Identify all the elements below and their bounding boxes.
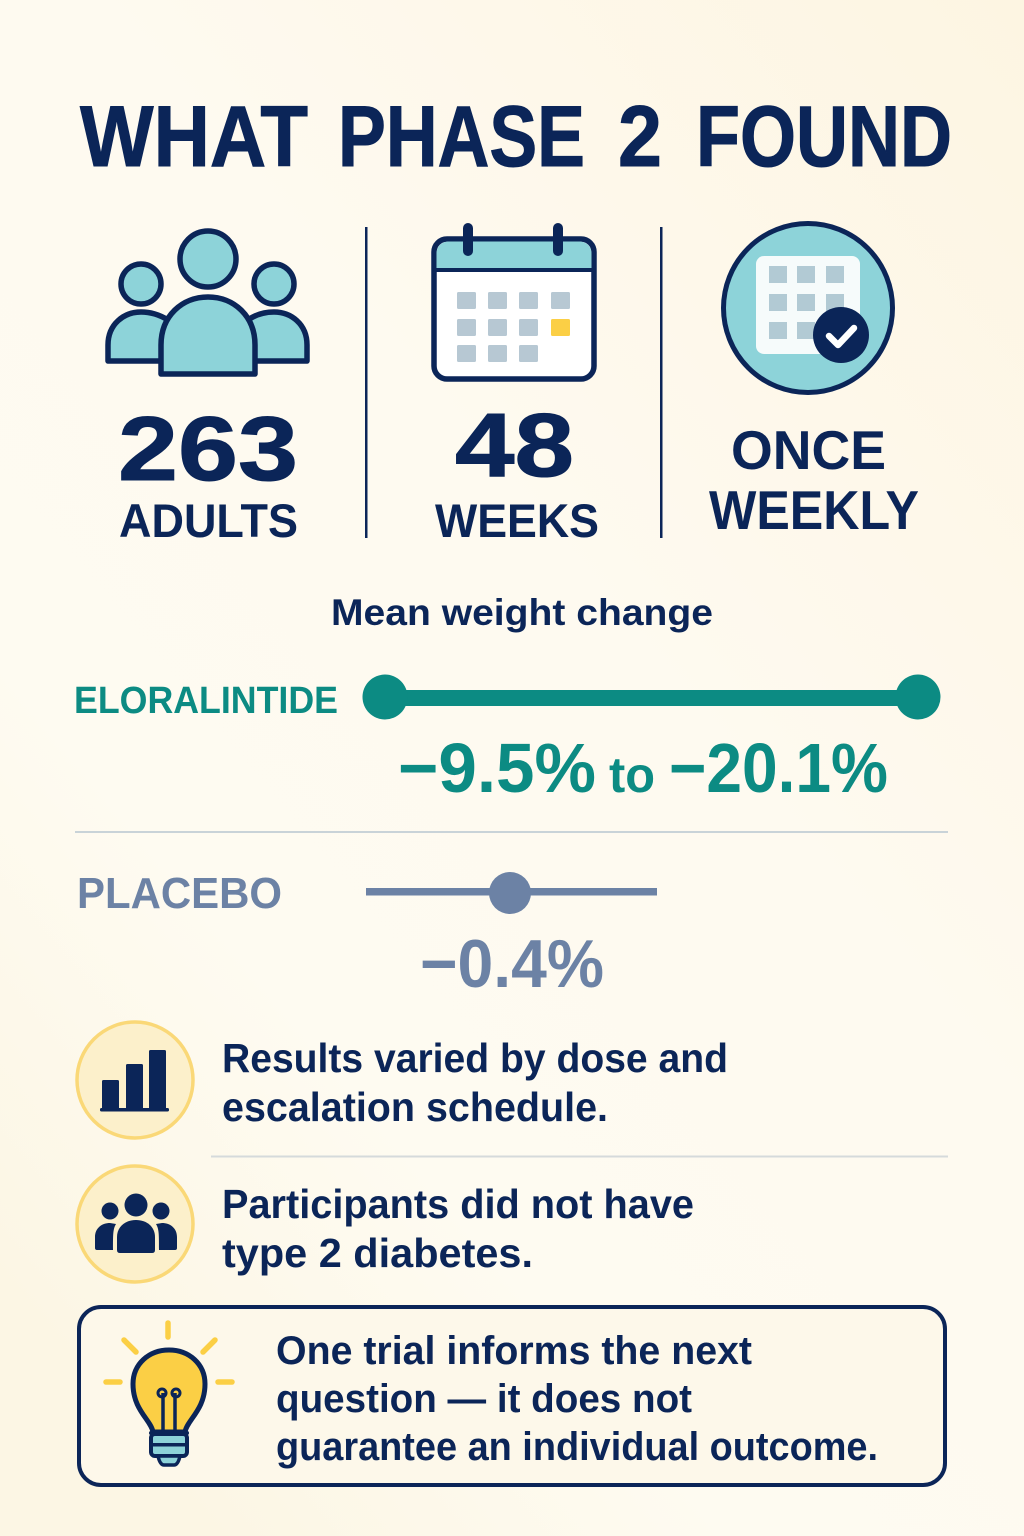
panel: note on participants [77,1166,694,1282]
title: FOUND [696,89,952,185]
text: callout message [276,1329,878,1469]
stat number: 263: 263 [118,399,298,500]
value: eloralintide range: −20.1% [669,729,888,807]
stat label: once weekly: WEEKLY [709,479,919,541]
panel: dosing stat [709,224,919,541]
panel: participants stat [108,231,307,547]
stat number: 48: 48 [455,396,574,496]
title: PHASE [338,89,585,185]
title [80,89,952,185]
text: callout message: question — it does not [276,1377,692,1421]
divider [365,227,368,538]
value: eloralintide range: to [609,747,655,803]
text: participants [222,1181,694,1276]
icon: calendar with check [724,224,892,392]
text: results varied: Results varied by dose and [222,1035,728,1081]
stat label: once weekly: ONCE [731,419,886,481]
text: callout message: guarantee an individual outcome. [276,1425,878,1469]
stat label: adults: ADULTS [119,494,298,547]
range bar: eloralintide [362,674,940,720]
title: WHAT [80,89,308,185]
panel: eloralintide result [74,674,940,807]
icon: group of adults [108,231,307,374]
icon: people [77,1166,193,1282]
subheading: mean weight change: Mean weight change [331,592,713,633]
panel: placebo result [77,869,657,1002]
stat label: once weekly [709,419,919,541]
icon: light bulb [106,1323,232,1465]
text: callout message: One trial informs the next [276,1329,752,1373]
panel: duration stat [434,223,599,547]
text: results varied [222,1035,728,1130]
range bar: placebo [366,872,657,914]
text: results varied: escalation schedule. [222,1084,608,1130]
panel: note on dose [77,1022,728,1138]
title: 2 [618,89,662,185]
label: placebo: PLACEBO [77,869,282,918]
text: participants: Participants did not have [222,1181,694,1227]
value: eloralintide range: −9.5% [398,729,596,807]
label: eloralintide: ELORALINTIDE [74,680,338,722]
divider [660,227,662,538]
text: participants: type 2 diabetes. [222,1230,533,1276]
stat label: weeks: WEEKS [435,494,599,547]
value: placebo: −0.4% [420,926,604,1002]
callout [79,1307,945,1485]
icon: bar chart [77,1022,193,1138]
value: eloralintide range [398,729,888,807]
icon: calendar [434,223,594,379]
